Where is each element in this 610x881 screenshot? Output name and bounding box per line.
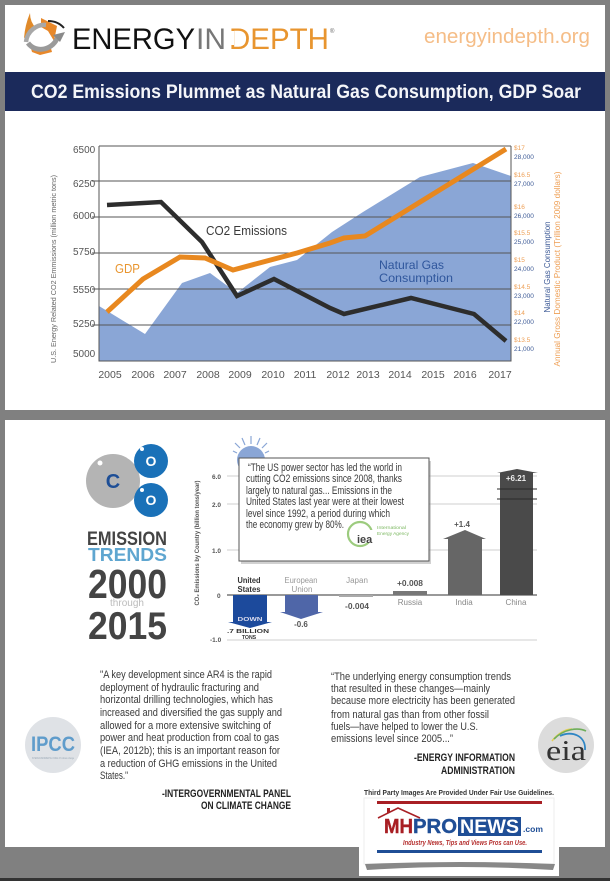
right axis values: 28,000 xyxy=(514,154,534,161)
attribution: EIA: -ENERGY INFORMATION xyxy=(414,752,515,764)
icon: IEA logo xyxy=(348,522,410,546)
text block: IPCC quote xyxy=(100,669,282,782)
gridlines and axis values: 0 xyxy=(217,593,221,600)
CO2 emissions line xyxy=(107,202,506,341)
bar: Russia: Russia xyxy=(398,598,423,607)
icon: sun xyxy=(233,436,269,474)
right axis values: $16 xyxy=(514,204,525,211)
heading: emission trends xyxy=(87,529,167,648)
bar: Russia xyxy=(393,579,427,607)
bar: Japan: Japan xyxy=(346,576,368,585)
text block: IPCC quote: allowed for a more extensive switching of xyxy=(100,720,272,732)
logo wordmark: .com xyxy=(523,825,543,834)
attribution: IPCC: -INTERGOVERNMENTAL PANEL xyxy=(162,788,291,800)
text block: EIA quote xyxy=(331,671,515,745)
bar: European Union: Union xyxy=(292,585,312,594)
text block: EIA quote: because more electricity has been generated xyxy=(331,695,515,707)
heading: emission trends: EMISSION xyxy=(87,529,167,550)
gridlines and axis values: 1.0 xyxy=(212,548,221,555)
heading: emission trends: through xyxy=(110,598,144,609)
logo wordmark: MH xyxy=(384,816,413,838)
bar: United States: .7 BILLION xyxy=(227,629,269,635)
left axis: 6000 xyxy=(73,211,96,222)
callout: IEA quote: United States last year were at their lowest xyxy=(246,496,404,508)
line chart xyxy=(49,145,562,381)
logo wordmark: ® xyxy=(330,28,335,35)
tagline: Industry News, Tips and Views Pros can Use. xyxy=(403,840,527,847)
gridlines and axis values: 2.0 xyxy=(212,502,221,509)
bar: United States: States xyxy=(238,584,261,594)
text block: EIA quote: from natural gas than from other fossil xyxy=(331,709,489,721)
line chart: Consumption xyxy=(379,271,453,285)
left axis: 5000 xyxy=(73,349,96,360)
text block: EIA quote: “The underlying energy consumption trends xyxy=(331,671,511,683)
icon: IPCC logo: IPCC xyxy=(31,733,75,756)
year axis: 2011 xyxy=(294,369,316,381)
line chart: Natural Gas xyxy=(379,258,444,272)
bar: Japan xyxy=(339,576,373,611)
bar: United States xyxy=(227,575,272,641)
bar: China xyxy=(497,469,538,607)
logo wordmark: NEWS xyxy=(460,817,519,838)
left axis: 6500 xyxy=(73,145,96,156)
gridlines and axis values: CO₂ Emissions by Country (billion tons/year) xyxy=(194,480,201,606)
year axis: 2017 xyxy=(488,369,512,381)
year axis: 2006 xyxy=(131,369,155,381)
bar: European Union: -0.6 xyxy=(294,620,308,629)
bar: India xyxy=(443,520,486,607)
right axis values: 27,000 xyxy=(514,181,534,188)
icon: IEA logo: International xyxy=(377,525,406,530)
website address: energyindepth.org xyxy=(424,26,590,48)
logo wordmark: PRO xyxy=(413,816,457,838)
year axis xyxy=(98,369,512,381)
icon: CO2 molecule: O xyxy=(146,453,157,469)
year axis: 2014 xyxy=(388,369,412,381)
attribution: IPCC: ON CLIMATE CHANGE xyxy=(201,800,291,812)
bar chart xyxy=(194,469,538,644)
right axis values: $14 xyxy=(514,310,525,317)
line chart: GDP xyxy=(115,261,140,276)
right axis values: $14.5 xyxy=(514,284,531,291)
right axis values: 22,000 xyxy=(514,319,534,326)
callout: IEA quote: level since 1992, a period during which xyxy=(246,508,390,520)
logo wordmark xyxy=(72,23,335,56)
right axis values: $15 xyxy=(514,257,525,264)
year axis: 2008 xyxy=(196,369,220,381)
bar: Russia: +0.008 xyxy=(397,579,424,588)
text block: IPCC quote: power and heat production from coal to gas xyxy=(100,732,279,744)
right axis values: $15.5 xyxy=(514,230,531,237)
text block: IPCC quote: a reduction of GHG emissions in the United xyxy=(100,758,277,770)
third party notice: Third Party Images Are Provided Under Fair Use Guidelines. xyxy=(364,788,554,797)
right axis values: $13.5 xyxy=(514,337,531,344)
year axis: 2016 xyxy=(453,369,477,381)
year axis: 2010 xyxy=(261,369,285,381)
gridlines and axis values: 6.0 xyxy=(212,474,221,481)
right axis values: $17 xyxy=(514,145,525,152)
callout: IEA quote xyxy=(239,458,431,564)
icon: IEA logo: Energy Agency xyxy=(377,531,410,536)
callout: IEA quote: largely to natural gas... Emissions in the xyxy=(246,485,392,497)
chart labels: CO2 Emissions xyxy=(206,223,287,238)
right axis values: 24,000 xyxy=(514,266,534,273)
panel: header and line chart xyxy=(5,5,605,410)
right axis values: 21,000 xyxy=(514,346,534,353)
logo wordmark: IN xyxy=(196,23,226,56)
text block: IPCC quote: deployment of hydraulic fracturing and xyxy=(100,682,259,694)
logo wordmark xyxy=(384,816,543,838)
right axis values: 26,000 xyxy=(514,213,534,220)
natural gas area xyxy=(99,163,511,361)
text block: EIA quote: emissions level since 2005...” xyxy=(331,733,453,745)
logo wordmark: DEPTH xyxy=(229,23,329,56)
icon: EIA logo: eia xyxy=(546,736,587,767)
callout: IEA quote: the economy grew by 80%. xyxy=(246,519,344,531)
bar: India: +1.4 xyxy=(454,520,470,529)
logo wordmark: ENERGY xyxy=(72,23,195,56)
title banner xyxy=(5,72,605,111)
left axis: 5250 xyxy=(73,319,96,330)
year axis: 2012 xyxy=(326,369,350,381)
text block: IPCC quote: (IEA, 2012b); this is an important reason for xyxy=(100,745,280,757)
text block: EIA quote: fuels—have helped to lower the U.S. xyxy=(331,721,478,733)
bar: European Union: European xyxy=(284,576,318,585)
text block: IPCC quote: States." xyxy=(100,770,128,782)
attribution: IPCC xyxy=(162,788,291,812)
year axis: 2015 xyxy=(421,369,445,381)
right axis values: 25,000 xyxy=(514,239,534,246)
panel: emission trends xyxy=(5,420,605,847)
heading: emission trends: 2015 xyxy=(88,605,167,648)
left axis: 5550 xyxy=(73,285,96,296)
year axis: 2005 xyxy=(98,369,122,381)
bar: Japan: -0.004 xyxy=(345,602,370,611)
icon: EIA logo xyxy=(538,717,594,773)
icon: CO2 molecule: O xyxy=(146,492,157,508)
attribution: EIA xyxy=(414,752,515,777)
bar: United States: DOWN xyxy=(238,617,263,623)
icon: IEA logo: iea xyxy=(357,534,373,546)
icon: IPCC logo xyxy=(25,717,81,773)
title banner: CO2 Emissions Plummet as Natural Gas Consumption, GDP Soar xyxy=(31,82,582,103)
attribution: EIA: ADMINISTRATION xyxy=(441,765,515,777)
right axis values: 23,000 xyxy=(514,293,534,300)
year axis: 2013 xyxy=(356,369,380,381)
gridlines and axis values xyxy=(194,474,537,644)
left axis: 5750 xyxy=(73,247,96,258)
bar: China: +6.21 xyxy=(506,474,527,483)
year axis: 2007 xyxy=(163,369,187,381)
right axis values xyxy=(514,145,534,353)
left axis: 6250 xyxy=(73,179,96,190)
right axis values: $16.5 xyxy=(514,172,531,179)
left axis title: U.S. Energy Related CO2 Emmissions (million metric tons) xyxy=(49,175,58,363)
left axis xyxy=(73,145,96,360)
text block: IPCC quote: "A key development since AR4 is the rapid xyxy=(100,669,272,681)
icon: CO2 molecule: C xyxy=(106,471,120,493)
icon: Energy In Depth logo swirl xyxy=(24,13,65,55)
heading: emission trends: 2000 xyxy=(88,561,167,607)
icon: CO2 molecule xyxy=(86,444,168,517)
text block: EIA quote: that resulted in these changes—mainly xyxy=(331,683,490,695)
right axis title: GDP: Annual Gross Domestic Product (Trillion 2009 dollars) xyxy=(552,171,562,366)
callout: IEA quote: “The US power sector has led the world in xyxy=(248,462,402,474)
drop shadow xyxy=(365,862,555,870)
GDP line xyxy=(107,149,506,312)
gridlines and axis values: -1.0 xyxy=(210,637,222,644)
bar: United States: TONS xyxy=(242,635,257,641)
bar: India: India xyxy=(455,598,473,607)
icon: house roof xyxy=(378,808,420,818)
year axis: 2009 xyxy=(228,369,252,381)
callout: IEA quote: cutting CO2 emissions since 2008, thanks xyxy=(246,473,402,485)
icon: IPCC logo: INTERGOVERNMENTAL PANEL ON climate change xyxy=(32,756,74,760)
bar: United States: United xyxy=(238,575,260,585)
bar: China: China xyxy=(506,598,527,607)
heading: emission trends: TRENDS xyxy=(88,545,167,565)
bar: European Union xyxy=(280,576,323,629)
text block: IPCC quote: horizontal drilling technologies, which has xyxy=(100,694,273,706)
right axis title: natural gas: Natural Gas Consumption xyxy=(543,222,552,312)
text block: IPCC quote: increased and diversified the gas supply and xyxy=(100,707,282,719)
panel: MHProNews logo xyxy=(359,798,559,876)
